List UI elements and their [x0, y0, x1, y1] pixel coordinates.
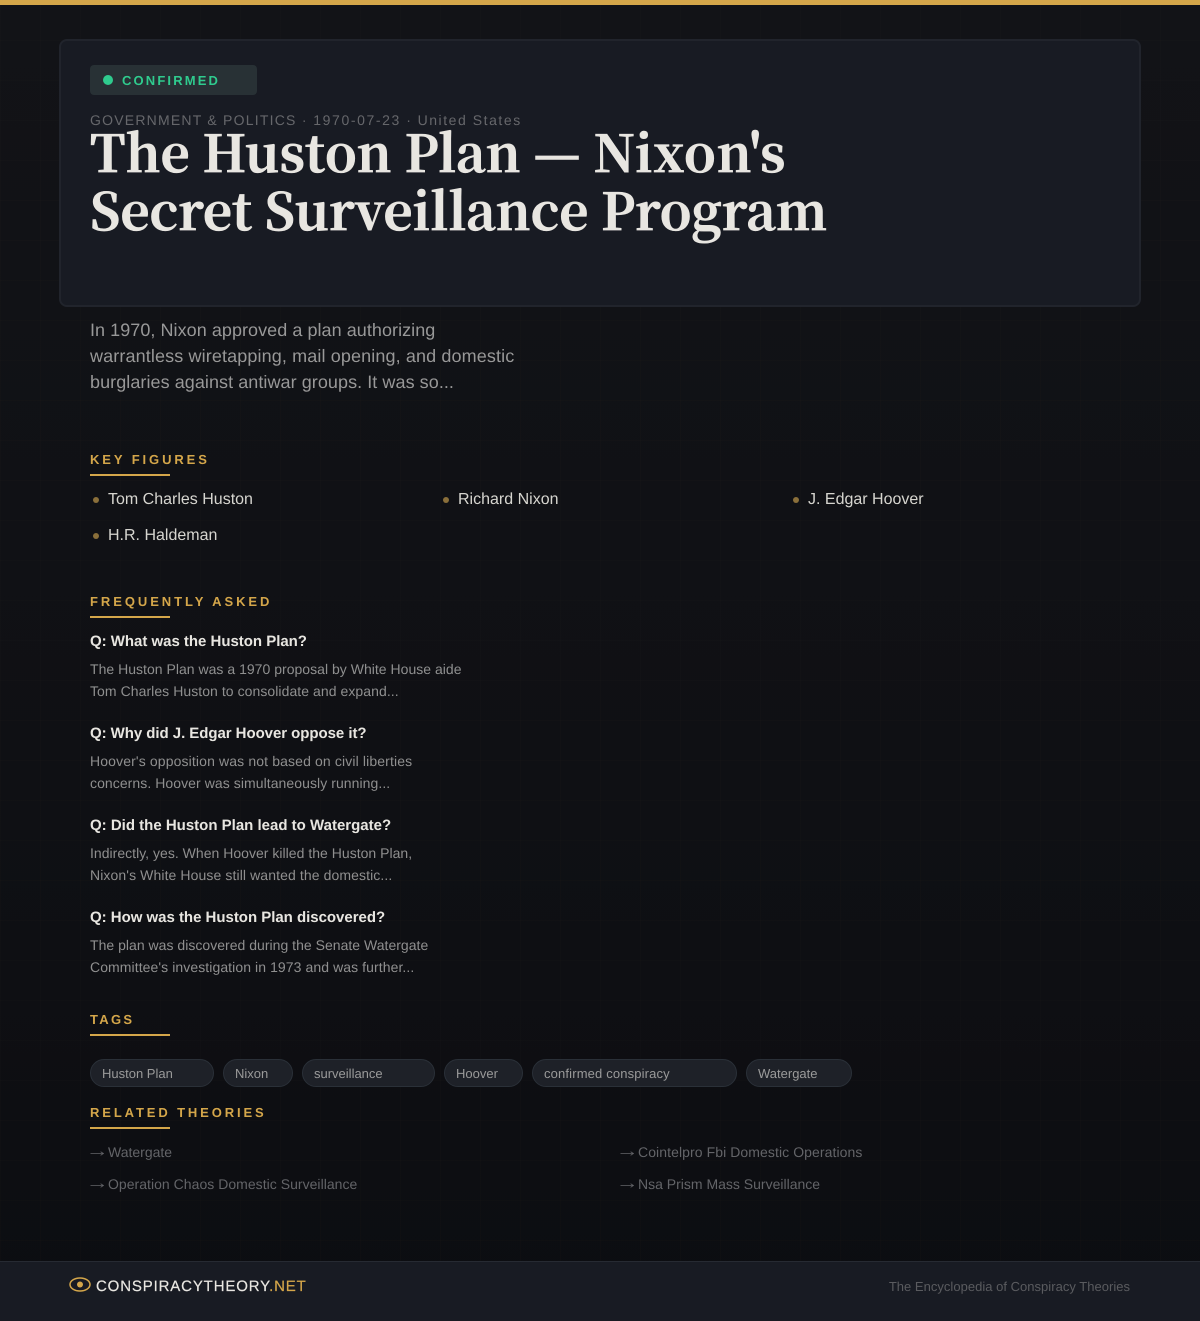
faq 3 question: Q: Did the Huston Plan lead to Watergate?: [90, 817, 391, 834]
figure: Tom Charles Huston: Tom Charles Huston: [108, 491, 253, 508]
faq 1 answer: [90, 661, 462, 699]
badge dot: [103, 75, 113, 85]
faq 4 answer: The plan was discovered during the Senate Watergate: [90, 937, 428, 953]
faq 2 answer: Hoover's opposition was not based on civil liberties: [90, 753, 412, 769]
heading: tags: TAGS: [90, 1012, 134, 1027]
tag: [223, 1059, 292, 1087]
faq 4 question: Q: How was the Huston Plan discovered?: [90, 909, 385, 926]
figure: Richard Nixon: Richard Nixon: [458, 491, 558, 508]
summary text: burglaries against antiwar groups. It was so...: [90, 372, 454, 392]
faq 1 question: Q: What was the Huston Plan?: [90, 633, 307, 650]
footer tagline: The Encyclopedia of Conspiracy Theories: [889, 1279, 1130, 1294]
summary text: warrantless wiretapping, mail opening, and domestic: [90, 346, 514, 366]
faq 1 answer: The Huston Plan was a 1970 proposal by White House aide: [90, 661, 462, 677]
tag: Hoover: [456, 1066, 498, 1081]
tag: Huston Plan: [102, 1066, 173, 1081]
heading: key figures: KEY FIGURES: [90, 452, 210, 467]
faq 3 answer: [90, 845, 412, 883]
heading: related theories: RELATED THEORIES: [90, 1105, 267, 1120]
status badge: [90, 65, 257, 95]
faq 4 answer: [90, 937, 428, 975]
footer bar: [0, 1261, 1200, 1321]
figure: J. Edgar Hoover: J. Edgar Hoover: [808, 491, 924, 508]
related link: Watergate: [108, 1144, 172, 1160]
related link: Operation Chaos Domestic Surveillance: [108, 1176, 357, 1192]
faq 3 answer: Indirectly, yes. When Hoover killed the Huston Plan,: [90, 845, 412, 861]
faq 2 question: Q: Why did J. Edgar Hoover oppose it?: [90, 725, 367, 742]
tag: [90, 1059, 214, 1087]
summary text: [90, 320, 514, 392]
summary text: In 1970, Nixon approved a plan authorizing: [90, 320, 435, 340]
tag: [532, 1059, 736, 1087]
brand name: CONSPIRACYTHEORY.NET: [96, 1278, 307, 1295]
figure: H.R. Haldeman: H.R. Haldeman: [108, 527, 217, 544]
top accent bar: [0, 0, 1200, 5]
tag: [444, 1059, 522, 1087]
category and date meta line: GOVERNMENT & POLITICS · 1970-07-23 · United States: [90, 112, 522, 128]
heading underline: [90, 474, 170, 476]
faq 2 answer: concerns. Hoover was simultaneously running...: [90, 775, 390, 791]
related link: Nsa Prism Mass Surveillance: [638, 1176, 820, 1192]
tag: Watergate: [758, 1066, 818, 1081]
faq 4 answer: Committee's investigation in 1973 and was further...: [90, 959, 414, 975]
tag: surveillance: [314, 1066, 383, 1081]
faq 2 answer: [90, 753, 412, 791]
title: [90, 112, 827, 244]
faq 1 answer: Tom Charles Huston to consolidate and expand...: [90, 683, 399, 699]
tag: [746, 1059, 852, 1087]
title: The Huston Plan — Nixon's: [90, 112, 786, 186]
icon: eye logo: [69, 1277, 91, 1292]
heading underline: [90, 1034, 170, 1036]
title: Secret Surveillance Program: [90, 170, 827, 244]
heading: frequently asked: FREQUENTLY ASKED: [90, 594, 272, 609]
faq 3 answer: Nixon's White House still wanted the domestic...: [90, 867, 392, 883]
heading underline: [90, 1127, 170, 1129]
heading underline: [90, 616, 170, 618]
related link: Cointelpro Fbi Domestic Operations: [638, 1144, 862, 1160]
tag: [302, 1059, 434, 1087]
badge label: CONFIRMED: [122, 73, 220, 88]
tag: confirmed conspiracy: [544, 1066, 670, 1081]
panel: header card: [59, 39, 1141, 307]
tag: Nixon: [235, 1066, 268, 1081]
